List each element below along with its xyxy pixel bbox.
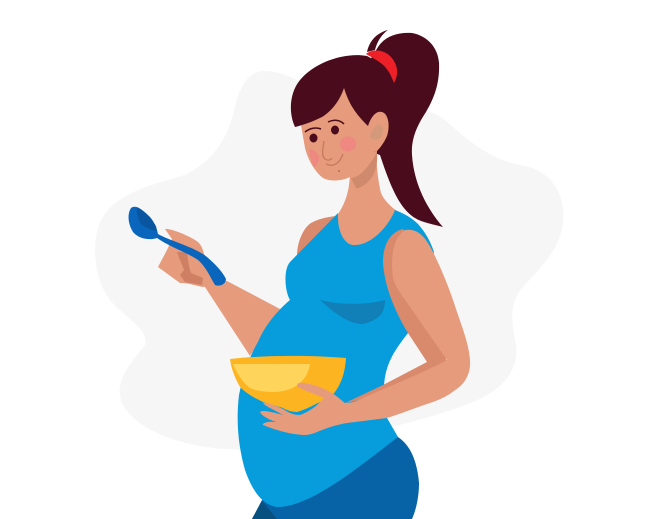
cheek right bbox=[340, 136, 356, 152]
trousers shadow bbox=[252, 501, 277, 519]
front arm bbox=[260, 229, 470, 435]
neck shadow bbox=[351, 152, 377, 188]
spoon bowl shade bbox=[137, 207, 157, 231]
background blob bbox=[95, 71, 563, 450]
brows bbox=[305, 120, 344, 132]
mouth bbox=[326, 154, 343, 165]
hair band bbox=[366, 51, 397, 83]
fringe hair bbox=[291, 55, 392, 127]
arm and hand bbox=[260, 230, 470, 435]
hair ponytail bbox=[365, 30, 443, 227]
cheek left bbox=[309, 149, 319, 167]
arm shadow bbox=[345, 229, 447, 403]
hand shadow bbox=[177, 252, 203, 285]
neck bbox=[336, 150, 397, 246]
face bbox=[301, 84, 376, 181]
ear bbox=[367, 112, 389, 152]
trousers bbox=[252, 437, 419, 519]
hand bbox=[158, 229, 226, 287]
spoon bbox=[129, 207, 226, 286]
bowl bbox=[230, 356, 346, 412]
mole bbox=[338, 170, 340, 172]
back arm shoulder bbox=[297, 216, 345, 262]
eye right bbox=[331, 126, 339, 134]
bowl highlight bbox=[233, 364, 310, 392]
top fold shadow bbox=[320, 300, 385, 324]
eye left bbox=[310, 134, 318, 142]
nose bbox=[323, 141, 332, 160]
forearm holding spoon bbox=[158, 229, 280, 356]
tank top bbox=[238, 210, 434, 507]
